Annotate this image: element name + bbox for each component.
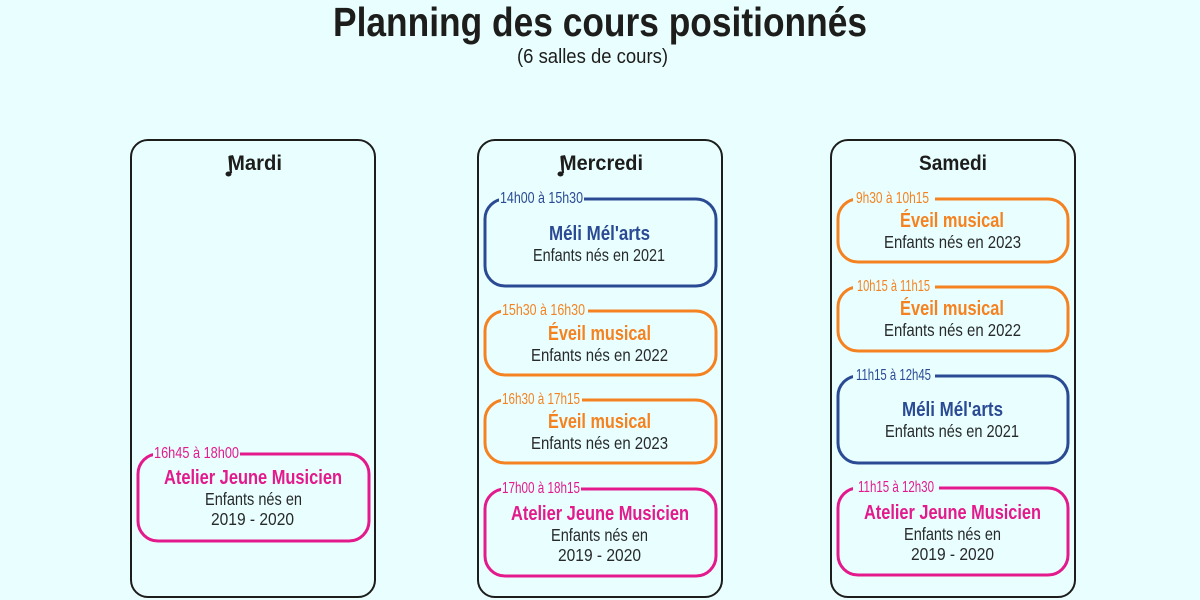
- course card: Éveil musical 2023, Samedi: [838, 190, 1068, 262]
- course card: Atelier Jeune Musicien, Samedi: 11h15 à 12h30: [858, 479, 934, 496]
- course card: Méli Mél'arts, Samedi: Enfants nés en 2021: [885, 421, 1019, 441]
- title: Planning des cours positionnés: [333, 0, 867, 45]
- course card: Éveil musical 2023, Mercredi: [485, 391, 716, 463]
- course card: Atelier Jeune Musicien, Samedi: Atelier Jeune Musicien: [864, 502, 1041, 524]
- course card: Éveil musical 2022, Samedi: [838, 278, 1068, 351]
- course card: Méli Mél'arts, Mercredi: 14h00 à 15h30: [500, 190, 583, 207]
- course card: Atelier Jeune Musicien, Samedi: [838, 479, 1068, 575]
- course card: Atelier Jeune Musicien, Mardi: [138, 445, 369, 541]
- course card: Atelier Jeune Musicien, Mercredi: 2019 - 2020: [558, 545, 641, 565]
- heading: Samedi: Samedi: [919, 152, 987, 175]
- course card: Éveil musical 2023, Mercredi: Éveil musical: [548, 410, 651, 433]
- course card: Éveil musical 2023, Samedi: Enfants nés en 2023: [884, 232, 1021, 252]
- course card: Atelier Jeune Musicien, Mercredi: 17h00 à 18h15: [502, 480, 580, 497]
- panel: Mardi: [131, 140, 375, 597]
- course card: Méli Mél'arts, Samedi: Méli Mél'arts: [902, 399, 1003, 421]
- course card: Éveil musical 2022, Samedi: 10h15 à 11h15: [857, 278, 930, 295]
- heading: Mardi: Mardi: [228, 152, 282, 175]
- subtitle: (6 salles de cours): [517, 46, 668, 68]
- course card: Méli Mél'arts, Samedi: [838, 367, 1068, 463]
- course card: Éveil musical 2022, Samedi: Éveil musical: [900, 297, 1004, 320]
- course card: Éveil musical 2022, Mercredi: Éveil musical: [548, 322, 651, 345]
- course card: Éveil musical 2022, Mercredi: 15h30 à 16h30: [502, 302, 585, 319]
- course card: Éveil musical 2022, Mercredi: [485, 302, 716, 375]
- course card: Méli Mél'arts, Samedi: 11h15 à 12h45: [856, 367, 931, 384]
- panel: Mercredi: [478, 140, 722, 597]
- course card: Atelier Jeune Musicien, Mardi: 2019 - 2020: [211, 509, 294, 529]
- course card: Atelier Jeune Musicien, Mercredi: [485, 480, 716, 576]
- course card: Éveil musical 2023, Samedi: 9h30 à 10h15: [856, 190, 929, 207]
- course card: Méli Mél'arts, Mercredi: Méli Mél'arts: [549, 223, 650, 245]
- course card: Éveil musical 2022, Samedi: Enfants nés en 2022: [884, 320, 1021, 340]
- course card: Atelier Jeune Musicien, Mercredi: Enfants nés en: [551, 525, 648, 545]
- course card: Atelier Jeune Musicien, Mardi: Enfants nés en: [205, 489, 302, 509]
- course card: Éveil musical 2023, Mercredi: Enfants nés en 2023: [531, 433, 668, 453]
- course card: Atelier Jeune Musicien, Samedi: Enfants nés en: [904, 524, 1001, 544]
- course card: Éveil musical 2023, Samedi: Éveil musical: [900, 209, 1004, 232]
- course card: Éveil musical 2023, Mercredi: 16h30 à 17h15: [502, 391, 580, 408]
- course card: Éveil musical 2022, Mercredi: Enfants nés en 2022: [531, 345, 668, 365]
- course card: Atelier Jeune Musicien, Samedi: 2019 - 2020: [911, 544, 994, 564]
- panel: Samedi: [831, 140, 1075, 597]
- course card: Atelier Jeune Musicien, Mardi: 16h45 à 18h00: [154, 445, 239, 462]
- course card: Méli Mél'arts, Mercredi: Enfants nés en 2021: [533, 245, 665, 265]
- heading: Mercredi: Mercredi: [560, 152, 643, 175]
- course card: Méli Mél'arts, Mercredi: [485, 190, 716, 286]
- course card: Atelier Jeune Musicien, Mercredi: Atelier Jeune Musicien: [511, 503, 689, 525]
- course card: Atelier Jeune Musicien, Mardi: Atelier Jeune Musicien: [164, 467, 342, 489]
